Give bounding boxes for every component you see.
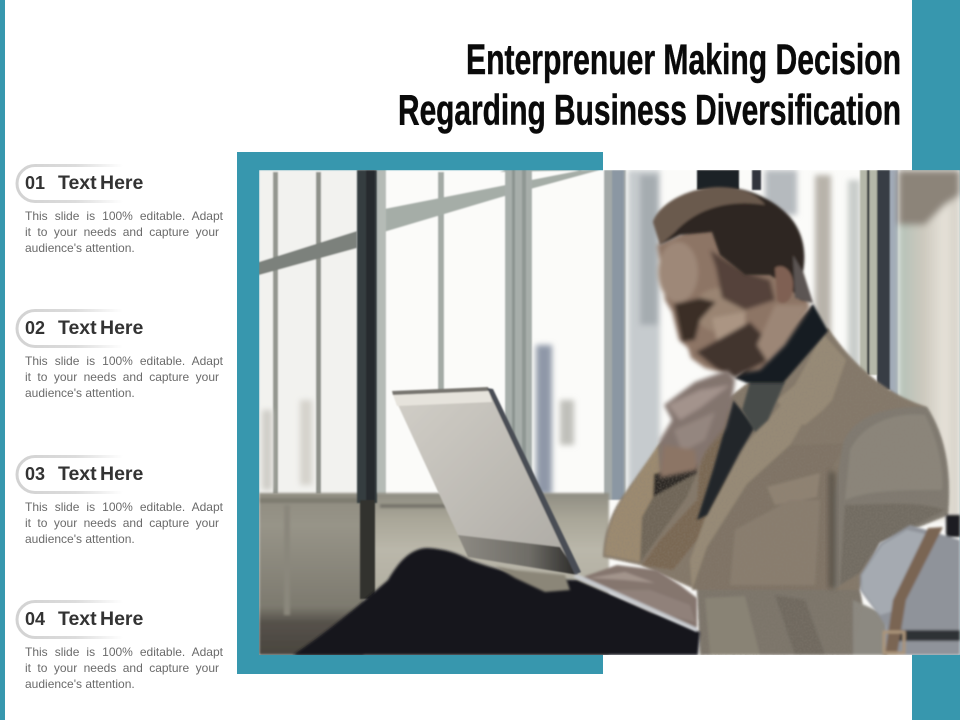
dark window posts [357, 170, 377, 599]
right teal strip [912, 0, 960, 720]
item 04: audience's attention. [25, 677, 135, 691]
item 04 [16, 600, 223, 691]
item 02: audience's attention. [25, 386, 135, 400]
jacket [600, 328, 960, 655]
head [657, 225, 810, 378]
wall under the window [259, 493, 609, 655]
legs [293, 548, 700, 655]
right window edge [697, 170, 898, 410]
item 02: Here [100, 317, 143, 339]
hand on chin [660, 370, 735, 478]
blurred exterior shapes [262, 170, 860, 500]
item 01: Here [100, 172, 143, 194]
teal frame behind photo [237, 152, 603, 674]
item 03: 03 [25, 464, 45, 484]
item 02: 02 [25, 318, 45, 338]
grey sweater at the collar [742, 382, 785, 432]
dark shirt under the jacket [697, 400, 755, 520]
item 02: it to your needs and capture your [25, 370, 219, 384]
typing hand [573, 565, 697, 632]
item 03: it to your needs and capture your [25, 516, 219, 530]
item 01: audience's attention. [25, 241, 135, 255]
item 02 [16, 309, 223, 400]
soft shadow between body and sleeve [829, 472, 835, 588]
item 04: 04 [25, 609, 45, 629]
item 01 [16, 164, 223, 255]
laptop strap and keyboard glimpse [495, 566, 570, 592]
bag [860, 515, 960, 655]
item 01: it to your needs and capture your [25, 225, 219, 239]
turtleneck [735, 304, 828, 383]
item 03: Here [100, 463, 143, 485]
item 04: This slide is 100% editable. Adapt [25, 645, 223, 659]
item 02: This slide is 100% editable. Adapt [25, 354, 223, 368]
left teal strip [0, 0, 5, 720]
photo: man working on a laptop by a window [259, 170, 960, 655]
item 01: 01 [25, 173, 45, 193]
item 03 [16, 455, 223, 546]
item 04: it to your needs and capture your [25, 661, 219, 675]
laptop [392, 387, 581, 575]
title [398, 37, 901, 134]
item 01: This slide is 100% editable. Adapt [25, 209, 223, 223]
item 04: Here [100, 608, 143, 630]
item 04: Text [58, 608, 97, 630]
item 03: Text [58, 463, 97, 485]
window background [259, 170, 960, 655]
item 02: Text [58, 317, 97, 339]
item 01: Text [58, 172, 97, 194]
item 03: audience's attention. [25, 532, 135, 546]
item 03: This slide is 100% editable. Adapt [25, 500, 223, 514]
